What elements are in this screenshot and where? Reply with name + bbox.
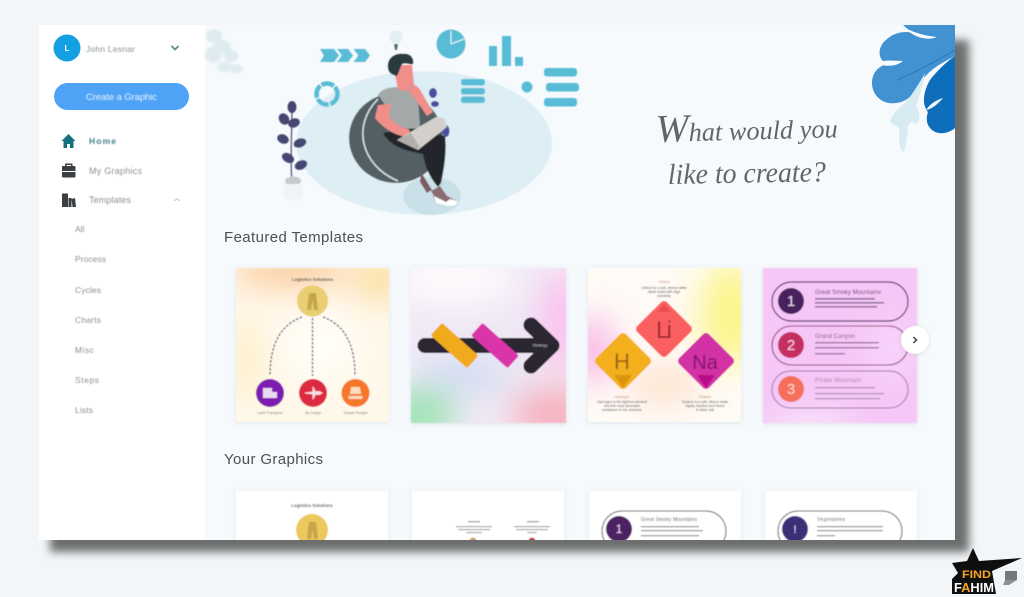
heading script: what would you like to create bbox=[655, 102, 838, 191]
template card: elements bbox=[566, 258, 764, 432]
nav: misc: Misc bbox=[75, 345, 95, 355]
hair bbox=[388, 54, 413, 76]
graphic card 3 bbox=[589, 491, 741, 551]
monstera leaf decoration bbox=[872, 25, 955, 152]
app window bbox=[39, 25, 955, 551]
graphic card 4 bbox=[765, 491, 917, 551]
nav: templates: Templates bbox=[89, 195, 132, 205]
heading: featured templates: Featured Templates bbox=[224, 229, 363, 246]
top hub circle bbox=[297, 286, 328, 316]
template card: logistics bbox=[226, 250, 408, 432]
magenta tag bbox=[471, 323, 519, 368]
pill 1 bbox=[772, 282, 908, 321]
heading: your graphics: Your Graphics bbox=[224, 451, 323, 468]
icon: templates books bbox=[62, 194, 76, 207]
nav: charts: Charts bbox=[75, 315, 101, 325]
light bulb icon bbox=[390, 30, 402, 50]
nav: steps: Steps bbox=[75, 375, 99, 385]
large pale ellipse bbox=[296, 71, 552, 215]
bottom captions: in table salt bbox=[696, 408, 714, 412]
diamond: H: H bbox=[614, 349, 630, 374]
icon: laptop bbox=[1003, 571, 1017, 585]
top caption: Lithium bbox=[658, 280, 670, 284]
bottom captions: Sodium bbox=[699, 395, 711, 399]
graphic card 3: 1 bbox=[616, 522, 623, 536]
legs bbox=[383, 128, 446, 187]
icon: truck bbox=[263, 388, 277, 398]
icon: ship bbox=[348, 387, 363, 399]
graphic card 1: Logistics Solutions bbox=[291, 503, 333, 508]
main content background bbox=[205, 25, 955, 540]
arrow label: Strategy bbox=[533, 342, 547, 348]
hub icon bbox=[307, 293, 318, 310]
graphic card 3: Great Smoky Mountains bbox=[641, 517, 698, 523]
sidebar bbox=[39, 25, 205, 540]
pie chart icon bbox=[436, 30, 466, 58]
user avatar bbox=[54, 34, 80, 62]
pill 2: 2 bbox=[787, 337, 795, 354]
create a graphic button bbox=[54, 83, 189, 110]
beanbag bbox=[349, 93, 443, 183]
top caption: reactivity bbox=[657, 294, 671, 298]
captions: By Cargo bbox=[305, 411, 321, 415]
nav: home: Home bbox=[89, 136, 116, 146]
pill 1: Great Smoky Mountains bbox=[815, 290, 881, 296]
plane circle bbox=[299, 379, 327, 407]
nav: lists: Lists bbox=[75, 405, 93, 415]
icon: home bbox=[62, 134, 76, 148]
card gradient bbox=[566, 258, 764, 432]
diamond: Na bbox=[676, 331, 736, 391]
yellow tag bbox=[431, 323, 478, 368]
background plant behind person bbox=[429, 88, 450, 137]
captions bbox=[257, 411, 368, 415]
card gradient bbox=[378, 255, 600, 445]
nav: process: Process bbox=[75, 254, 106, 264]
pill 2: Grand Canyon bbox=[815, 334, 855, 340]
icon: my graphics briefcase bbox=[62, 164, 76, 178]
dot and list icon bbox=[522, 68, 579, 106]
nav: my graphics: My Graphics bbox=[89, 166, 142, 176]
logo star bbox=[952, 548, 1022, 594]
graphic card 4: Vegetables bbox=[817, 517, 846, 523]
user name: John Lesnar bbox=[86, 44, 135, 54]
diamond: Na: Na bbox=[692, 352, 719, 374]
bottom captions: and the most abundant bbox=[604, 404, 640, 408]
ring cycle icon bbox=[316, 84, 338, 104]
truck circle bbox=[256, 379, 284, 407]
database stack icon bbox=[461, 79, 485, 103]
potted plant bbox=[276, 100, 308, 185]
hero illustration bbox=[205, 29, 579, 215]
pill 3 bbox=[772, 371, 908, 408]
nav: cycles: Cycles bbox=[75, 285, 101, 295]
person bbox=[375, 54, 457, 206]
bottom captions: highly reactive and found bbox=[686, 404, 725, 408]
top caption bbox=[641, 280, 687, 298]
card title: Logistics Solutions bbox=[292, 277, 334, 282]
script line two: like to create? bbox=[668, 156, 827, 191]
icon: plane bbox=[305, 387, 322, 399]
bottom captions: substance in the universe bbox=[602, 408, 642, 412]
graphic card 2 bbox=[412, 491, 564, 546]
diamond: H bbox=[593, 331, 653, 391]
card gradient bbox=[753, 258, 927, 440]
template card: numbered list bbox=[753, 258, 927, 440]
graphic card 1 bbox=[236, 491, 388, 546]
bar chart icon bbox=[489, 36, 523, 66]
laptop bbox=[397, 117, 447, 150]
corner leaf pattern bbox=[205, 29, 243, 74]
floor shadow bbox=[403, 177, 461, 215]
top caption: Lithium is a soft, silvery-white bbox=[641, 286, 687, 290]
top caption: alkali metal with high bbox=[648, 290, 680, 294]
pill 3: Pirate Mountain bbox=[815, 378, 861, 384]
captions: Ocean Freight bbox=[343, 411, 368, 415]
create a graphic button: Create a Graphic bbox=[86, 92, 157, 103]
icon: dropdown chevron bbox=[172, 46, 178, 50]
arms bbox=[375, 104, 410, 137]
ship circle bbox=[342, 379, 370, 407]
logo word fahim: FAHIM bbox=[954, 580, 994, 595]
graphic card 4: ! bbox=[793, 524, 797, 536]
chevron process icon bbox=[320, 49, 370, 62]
card gradient bbox=[226, 250, 408, 432]
head bbox=[393, 65, 414, 92]
brand logo bbox=[952, 548, 1022, 595]
pill 1: 1 bbox=[787, 293, 795, 310]
next arrow button bbox=[901, 326, 929, 354]
bottom captions: Sodium is a soft, silvery metal bbox=[682, 400, 728, 404]
dashed connectors bbox=[270, 317, 355, 376]
template card: arrow bbox=[378, 255, 600, 445]
torso bbox=[378, 84, 420, 130]
script line one: What would you bbox=[655, 102, 838, 151]
bottom captions: Hydrogen is the lightest element bbox=[597, 400, 647, 404]
diamond: Li bbox=[634, 299, 694, 359]
bottom captions: Hydrogen bbox=[614, 395, 630, 399]
pill 2 bbox=[772, 326, 908, 365]
graphics row bbox=[236, 491, 917, 551]
bottom captions bbox=[597, 395, 728, 412]
pill 3: 3 bbox=[787, 381, 795, 398]
icon: templates chevron bbox=[174, 199, 180, 201]
arrow shape bbox=[425, 325, 552, 366]
shoes bbox=[430, 186, 456, 202]
logo word find: FIND bbox=[962, 569, 991, 581]
captions: Land Transport bbox=[257, 411, 284, 415]
user avatar: L bbox=[65, 44, 70, 53]
panel drop shadow bbox=[50, 40, 969, 552]
nav: all: All bbox=[75, 224, 85, 234]
diamond: Li: Li bbox=[656, 317, 672, 344]
